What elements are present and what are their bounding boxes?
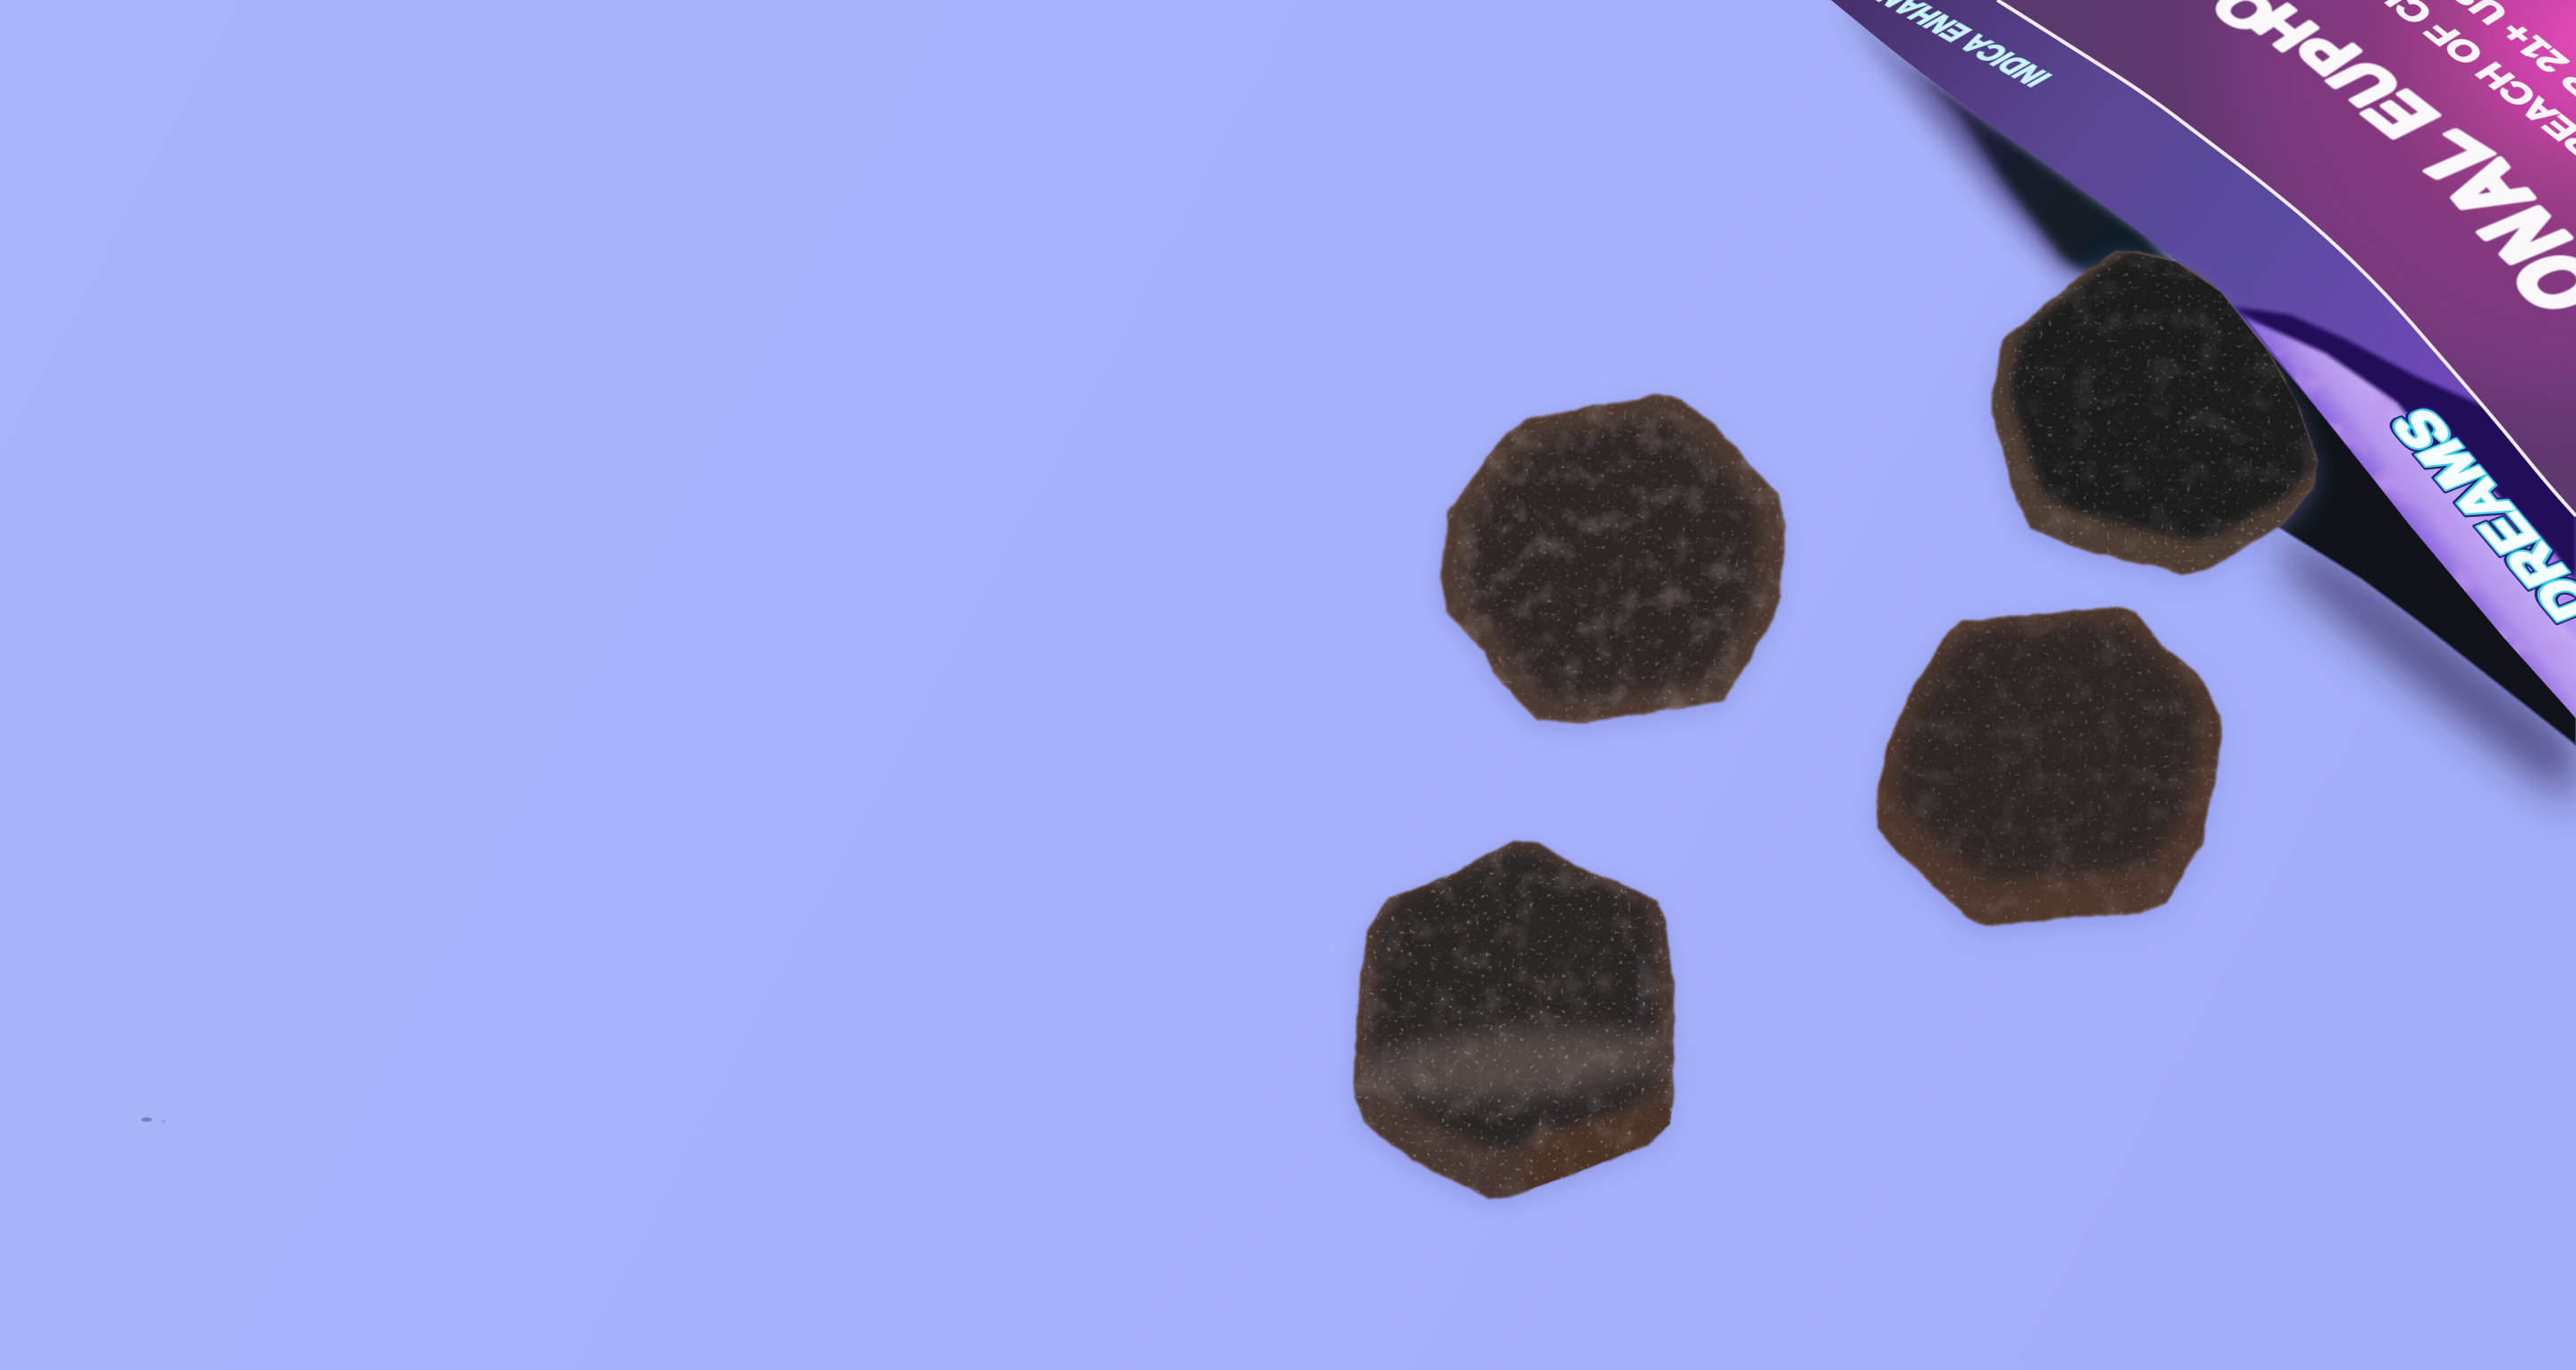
pouch soft shadow lower xyxy=(2278,527,2576,805)
gummy one xyxy=(1431,389,1789,729)
gummy two xyxy=(1351,836,1682,1205)
gummy three shadow xyxy=(1875,615,2218,933)
gummy two shadow xyxy=(1353,850,1671,1205)
magenta label panel xyxy=(1997,0,2576,516)
dark foil reflection xyxy=(2233,307,2576,581)
pouch soft shadow upper xyxy=(1843,0,2200,295)
gummy four texture xyxy=(1986,246,2326,577)
foil mottling xyxy=(2274,351,2576,718)
headline letters: A xyxy=(2422,150,2552,231)
light foil xyxy=(2242,313,2576,718)
speck on surface xyxy=(141,1118,165,1123)
headline letters: L xyxy=(2382,122,2515,188)
headline letters: P xyxy=(2284,18,2375,85)
gummy two flat base xyxy=(1521,1104,1673,1198)
gummy four dark core xyxy=(2012,252,2319,540)
gummy four xyxy=(1986,246,2326,579)
gummy two dark core xyxy=(1371,851,1657,1150)
gummy one dark core xyxy=(1464,419,1760,699)
gummy one texture xyxy=(1431,389,1789,729)
foil highlight fold xyxy=(2233,304,2576,724)
pouch front strip xyxy=(1831,0,2576,718)
headline letters xyxy=(2198,0,2576,324)
gummy two texture xyxy=(1351,836,1682,1203)
dark inner wedge upper xyxy=(1905,63,2209,304)
gummy three body xyxy=(1877,608,2220,926)
gummy three texture xyxy=(1869,604,2227,930)
headline letters: U xyxy=(2311,51,2417,115)
pouch back panel in shadow xyxy=(2182,241,2576,745)
headline letters: E xyxy=(2346,81,2456,147)
product pouch xyxy=(1824,0,2576,805)
gummy one body xyxy=(1440,396,1784,722)
gummy three xyxy=(1869,604,2227,933)
gummy four body xyxy=(1993,252,2317,572)
white divider line xyxy=(1997,0,2576,516)
gummy two frosted band xyxy=(1353,1019,1670,1109)
gummy two body xyxy=(1355,842,1673,1198)
gummy one shadow xyxy=(1438,403,1783,729)
gummy four shadow xyxy=(1989,259,2313,579)
gummy three dark core xyxy=(1897,621,2199,882)
